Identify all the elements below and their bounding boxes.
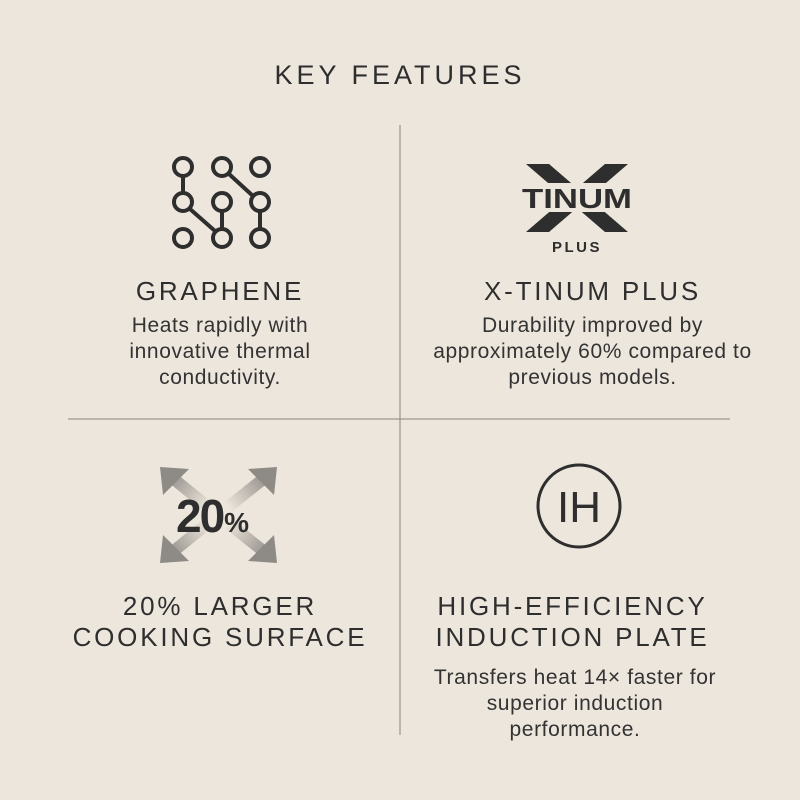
icon: IH [536,464,622,548]
heading: graphene: GRAPHENE [136,276,304,306]
heading: induction plate: INDUCTION PLATE [435,622,710,652]
heading: larger cooking surface: COOKING SURFACE [73,622,367,652]
text: induction plate: superior induction [487,692,663,715]
icon: graphene [172,156,271,249]
icon: 20%: 20% [176,490,249,542]
icon: x-tinum plus: PLUS [552,239,602,256]
text: graphene: innovative thermal [129,340,311,363]
text: x-tinum plus: approximately 60% compared to [433,340,752,363]
text: graphene: Heats rapidly with [132,314,308,337]
icon: 20% [160,467,277,563]
heading: x-tinum plus: X-TINUM PLUS [484,276,701,306]
icon: IH: IH [557,483,601,532]
title: KEY FEATURES [274,60,526,90]
icon: x-tinum plus: TINUM [522,183,632,214]
text: x-tinum plus [433,314,752,389]
text: x-tinum plus: Durability improved by [482,314,703,337]
heading: larger cooking surface [73,591,367,652]
text: induction plate [434,666,716,741]
text: induction plate: performance. [510,718,640,741]
heading: larger cooking surface: 20% LARGER [123,591,317,621]
heading: induction plate [435,591,710,652]
text: induction plate: Transfers heat 14× faster for [434,666,716,689]
text: graphene [129,314,311,389]
heading: induction plate: HIGH-EFFICIENCY [437,591,708,621]
text: x-tinum plus: previous models. [508,366,677,389]
text: graphene: conductivity. [159,366,281,389]
icon: x-tinum plus [522,164,632,256]
